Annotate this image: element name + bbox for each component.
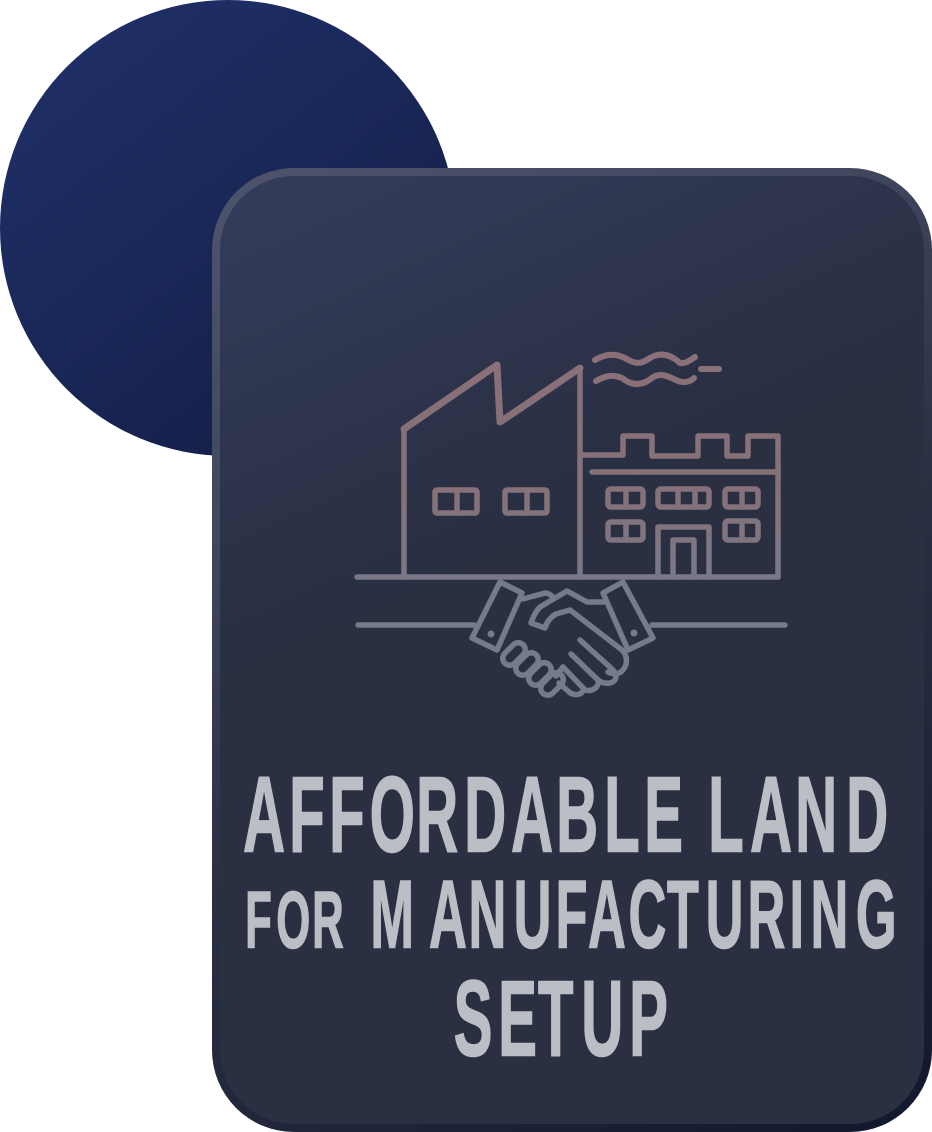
icon: smoke (595, 355, 719, 384)
icon: factory and handshake (357, 355, 785, 698)
title (243, 754, 897, 1079)
title line 3: SETUP (454, 958, 668, 1079)
title line 2: MANUFACTURING (370, 859, 897, 969)
icon: factory building (357, 365, 778, 577)
title line 1: AFFORDABLE LAND (243, 754, 888, 875)
decorative navy circle (0, 0, 456, 456)
title line 2: FOR (245, 874, 344, 965)
card panel (212, 168, 932, 1132)
icon: handshake (358, 582, 785, 698)
